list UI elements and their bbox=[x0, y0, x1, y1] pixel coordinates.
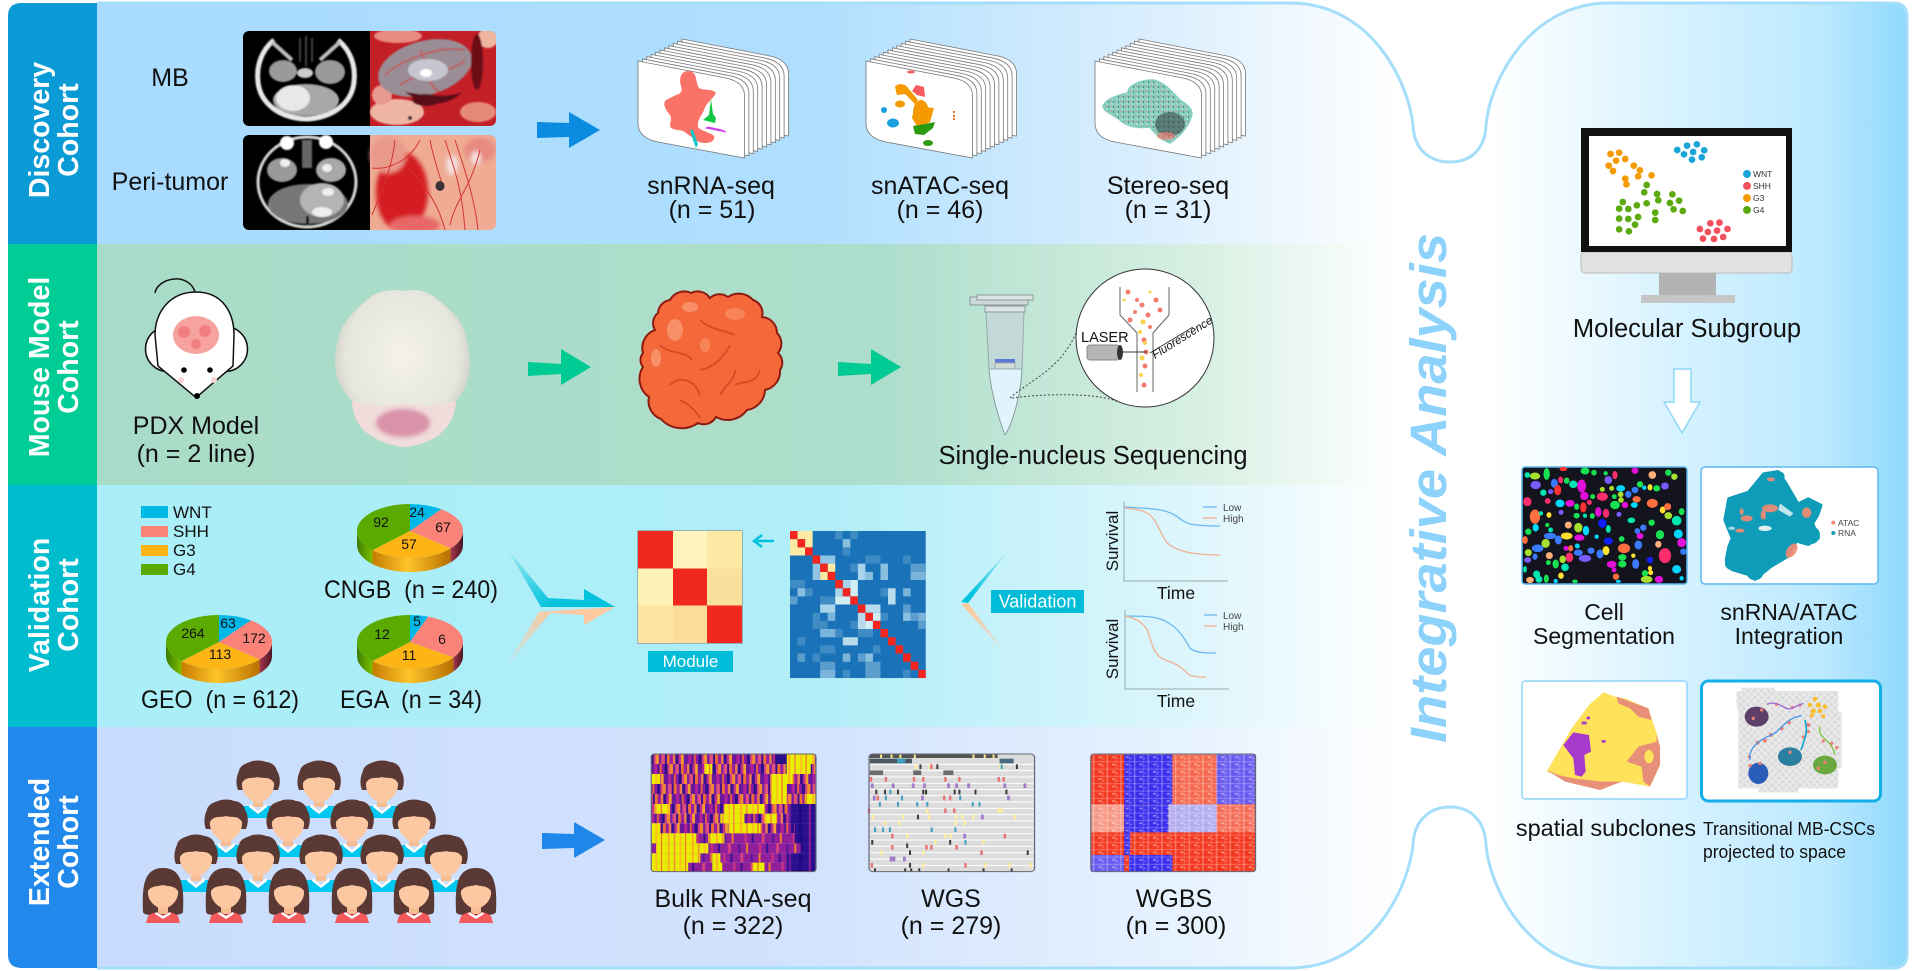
label: snRNA/ATAC Integration: Integration bbox=[1735, 623, 1843, 649]
label: Stereo-seq: Stereo-seq bbox=[1107, 172, 1229, 200]
panel: integrative analysis right side bbox=[1516, 128, 1880, 862]
icon: monitor with subgroup scatter: SHH bbox=[1753, 181, 1771, 191]
legend: subgroup colors: G3 bbox=[173, 541, 196, 560]
label: snRNA/ATAC Integration: snRNA/ATAC bbox=[1720, 599, 1858, 625]
legend: subgroup colors: WNT bbox=[173, 503, 212, 522]
label: Cell Segmentation: Segmentation bbox=[1533, 623, 1675, 649]
tab: Validation Cohort: Validation bbox=[24, 538, 56, 672]
arrow: validation merge bbox=[961, 552, 1007, 655]
label: PDX Model: PDX Model bbox=[133, 412, 259, 440]
legend: subgroup colors: G4 bbox=[173, 560, 196, 579]
chart: survival 1: High bbox=[1223, 514, 1244, 525]
label: Transitional MB-CSCs: Transitional MB-CSCs bbox=[1703, 818, 1875, 839]
panel: cell segmentation bbox=[1522, 467, 1687, 584]
arrow: merge into module bbox=[505, 550, 615, 668]
panel: spatial subclones map bbox=[1522, 681, 1687, 799]
tab: Validation Cohort bbox=[8, 485, 97, 727]
pie chart: EGA bbox=[357, 613, 463, 683]
label: EGA: EGA (n = 34) bbox=[340, 686, 482, 714]
tab: Extended Cohort: Extended bbox=[24, 778, 56, 906]
text: LASER: LASER bbox=[1081, 330, 1129, 346]
pie chart: CNGB: 24 bbox=[409, 504, 425, 520]
icon: monitor with subgroup scatter: G4 bbox=[1753, 205, 1765, 215]
tab: Extended Cohort: Cohort bbox=[53, 795, 85, 889]
arrow: to tumor bbox=[528, 349, 591, 385]
label: Cell Segmentation: Cell bbox=[1584, 599, 1624, 625]
pie chart: CNGB: 92 bbox=[373, 514, 389, 530]
icon: monitor with subgroup scatter: G3 bbox=[1753, 193, 1765, 203]
icon: tube with droplet zoom bbox=[970, 269, 1215, 435]
chart: survival 1: Low bbox=[1223, 503, 1242, 514]
stack: snRNA-seq bbox=[638, 39, 788, 158]
chart: survival 2 bbox=[1103, 610, 1244, 711]
panel: transitional MB-CSCs map bbox=[1702, 681, 1880, 801]
pie chart: CNGB: 57 bbox=[401, 536, 417, 552]
label: snRNA-seq: snRNA-seq bbox=[647, 172, 775, 200]
label: MB: MB bbox=[151, 64, 189, 92]
heatmap: correlation matrix bbox=[790, 531, 926, 678]
pie chart: GEO: 264 bbox=[181, 625, 205, 641]
text: Fluorescence: Fluorescence bbox=[1150, 315, 1215, 362]
stack: Stereo-seq bbox=[1095, 39, 1246, 158]
pie chart: CNGB bbox=[357, 504, 463, 572]
pie chart: EGA: 6 bbox=[438, 631, 446, 647]
label: snATAC-seq: snATAC-seq bbox=[871, 172, 1009, 200]
tab: Discovery Cohort: Cohort bbox=[53, 83, 85, 177]
arrow: discovery bbox=[537, 112, 600, 148]
pie chart: EGA: 5 bbox=[413, 613, 421, 629]
panel: validation cohort content bbox=[141, 502, 1244, 714]
chart: survival 1 bbox=[1103, 502, 1244, 603]
label: WGS: WGS bbox=[921, 885, 981, 913]
tab: Mouse Model Cohort: Cohort bbox=[53, 320, 85, 414]
legend: subgroup colors bbox=[141, 503, 212, 579]
panel: snRNA/ATAC UMAP bbox=[1701, 467, 1878, 584]
label: PDX n: (n = 2 line) bbox=[137, 440, 255, 468]
tab: Extended Cohort bbox=[8, 727, 97, 968]
label: WGBS n: (n = 300) bbox=[1126, 912, 1226, 940]
label: CNGB: CNGB (n = 240) bbox=[324, 576, 498, 604]
label: GEO: GEO (n = 612) bbox=[141, 686, 299, 714]
images: peri-tumor MRI and surgical photo bbox=[243, 135, 496, 234]
panel: discovery cohort content bbox=[112, 28, 1246, 234]
tab: Discovery Cohort bbox=[8, 3, 97, 244]
chart: survival 1: Survival bbox=[1103, 511, 1122, 571]
icon: monitor with subgroup scatter bbox=[1581, 128, 1792, 303]
panel: extended cohort content bbox=[143, 754, 1256, 940]
arrow: to sequencing bbox=[838, 349, 901, 385]
icon: monitor with subgroup scatter: WNT bbox=[1753, 169, 1772, 179]
heatmap: module bbox=[638, 531, 742, 643]
icon: mouse with tumor bbox=[146, 279, 248, 399]
tab: Mouse Model Cohort: Mouse Model bbox=[24, 277, 56, 457]
label: Module bbox=[648, 651, 733, 672]
label: snRNA-seq n: (n = 51) bbox=[669, 196, 755, 224]
label: Validation: Validation bbox=[999, 592, 1076, 612]
label: Peri-tumor: Peri-tumor bbox=[112, 168, 228, 196]
stack: snATAC-seq bbox=[866, 39, 1016, 158]
label: Single-nucleus Sequencing: Single-nucleus Sequencing bbox=[938, 442, 1248, 470]
heatmap: WGS mutation matrix bbox=[869, 754, 1035, 872]
panel: mouse model cohort content bbox=[133, 269, 1248, 470]
chart: survival 2: Survival bbox=[1103, 619, 1122, 679]
label: Transitional MB-CSCs: projected to space bbox=[1703, 841, 1846, 862]
label: WGBS: WGBS bbox=[1136, 885, 1212, 913]
label: Module: Module bbox=[663, 652, 718, 671]
arrow: hollow down bbox=[1664, 369, 1700, 433]
label: Bulk n: (n = 322) bbox=[683, 912, 783, 940]
heatmap: WGBS bbox=[1091, 754, 1256, 872]
tab: Mouse Model Cohort bbox=[8, 244, 97, 485]
pie chart: EGA: 11 bbox=[402, 647, 416, 663]
pie chart: GEO: 172 bbox=[242, 630, 266, 646]
arrow: extended bbox=[542, 822, 605, 858]
label: Molecular Subgroup: Molecular Subgroup bbox=[1573, 315, 1801, 343]
images: MB MRI and surgical photo bbox=[243, 28, 498, 126]
label: Bulk RNA-seq: Bulk RNA-seq bbox=[654, 885, 812, 913]
pie chart: GEO bbox=[166, 615, 272, 683]
icon: group of patients bbox=[143, 760, 496, 923]
pie chart: EGA: 12 bbox=[374, 626, 390, 642]
pie chart: CNGB: 67 bbox=[435, 519, 451, 535]
label: Cell Segmentation bbox=[1533, 599, 1675, 649]
pie chart: GEO: 63 bbox=[220, 615, 236, 631]
chart: survival 2: Low bbox=[1223, 611, 1242, 622]
chart: survival 2: High bbox=[1223, 622, 1244, 633]
chart: survival 2: Time bbox=[1157, 691, 1195, 711]
panel: snRNA/ATAC UMAP: RNA bbox=[1838, 528, 1856, 538]
tab: Discovery Cohort: Discovery bbox=[24, 62, 56, 198]
label: snATAC-seq n: (n = 46) bbox=[897, 196, 983, 224]
label: Stereo-seq n: (n = 31) bbox=[1125, 196, 1211, 224]
panel: snRNA/ATAC UMAP: ATAC bbox=[1838, 518, 1859, 528]
photo: mouse brain with tumor bbox=[335, 290, 470, 447]
heatmap: bulk RNA-seq bbox=[650, 754, 817, 872]
arrow: small cyan bbox=[754, 535, 774, 547]
pie chart: GEO: 113 bbox=[209, 646, 231, 662]
icon: tumor bbox=[640, 291, 782, 428]
legend: subgroup colors: SHH bbox=[173, 522, 209, 541]
label: WGS n: (n = 279) bbox=[901, 912, 1001, 940]
label: Transitional MB-CSCs bbox=[1703, 818, 1875, 862]
tab: Validation Cohort: Cohort bbox=[53, 558, 85, 652]
label: snRNA/ATAC Integration bbox=[1720, 599, 1858, 649]
label: spatial subclones: spatial subclones bbox=[1516, 815, 1696, 841]
chart: survival 1: Time bbox=[1157, 583, 1195, 603]
heading: Integrative Analysis: Integrative Analysis bbox=[1400, 233, 1457, 743]
